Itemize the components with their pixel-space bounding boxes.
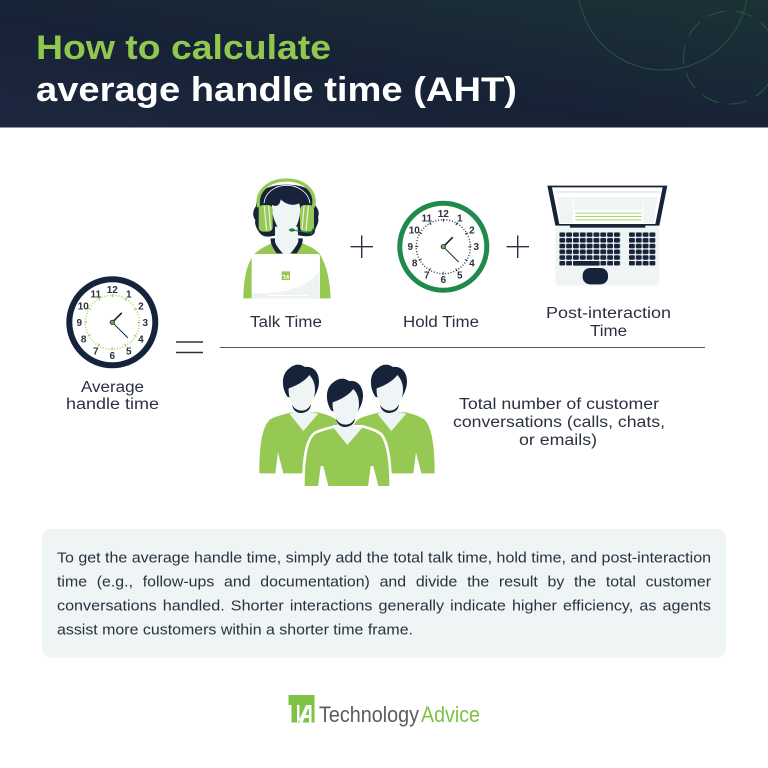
- label: total number of customer conversations: conversations (calls, chats,: [453, 414, 665, 431]
- logo: TechnologyAdvice: [288, 695, 480, 727]
- icon: average handle time clock: 4: [138, 334, 144, 345]
- title: average handle time (AHT): [36, 71, 517, 109]
- label: post-interaction time: Time: [590, 323, 627, 340]
- icon: average handle time clock: 2: [138, 301, 144, 312]
- label: post-interaction time: Post-interaction: [546, 305, 671, 322]
- icon: group of three people: [259, 365, 435, 487]
- title: How to calculate: [36, 29, 331, 67]
- panel: explanation: assist more customers within a shorter time frame.: [57, 621, 413, 638]
- title: [36, 29, 517, 109]
- icon: agent with headset and laptop: [243, 180, 331, 298]
- equals sign: [176, 342, 203, 352]
- icon: hold time clock: 5: [457, 271, 463, 282]
- icon: average handle time clock: 6: [110, 351, 116, 362]
- icon: average handle time clock: 7: [93, 346, 99, 357]
- label: post-interaction time: [546, 305, 671, 340]
- icon: average handle time clock: 1: [126, 289, 132, 300]
- icon: hold time clock: 8: [412, 259, 418, 270]
- icon: hold time clock: 12: [438, 209, 449, 220]
- plus sign one: [350, 236, 373, 258]
- icon: hold time clock: 11: [422, 214, 433, 225]
- icon: average handle time clock: 9: [77, 318, 83, 329]
- icon: hold time clock: 6: [441, 275, 447, 286]
- icon: hold time clock: 10: [409, 226, 420, 237]
- icon: average handle time clock: 11: [91, 289, 102, 300]
- icon: hold time clock: 7: [424, 271, 430, 282]
- plus sign two: [506, 236, 529, 258]
- panel: explanation: To get the average handle time, simply add the total talk time, hold time, and post-interaction: [57, 549, 711, 566]
- label: hold time: Hold Time: [403, 314, 479, 331]
- icon: hold time clock: 4: [469, 259, 475, 270]
- label: total number of customer conversations: [453, 396, 665, 449]
- icon: hold time clock: 2: [469, 226, 475, 237]
- label: total number of customer conversations: or emails): [519, 432, 597, 449]
- icon: laptop: [547, 186, 667, 286]
- icon: hold time clock: 9: [408, 242, 414, 253]
- fraction divider: [220, 346, 705, 348]
- label: average handle time: [66, 379, 159, 413]
- icon: average handle time clock: [69, 279, 155, 365]
- icon: average handle time clock: 3: [143, 318, 149, 329]
- label: average handle time: handle time: [66, 396, 159, 413]
- icon: hold time clock: [400, 203, 487, 290]
- panel: explanation: [42, 529, 726, 658]
- panel: explanation: time (e.g., follow-ups and documentation) and divide the result by the total customer: [57, 574, 711, 590]
- label: talk time: Talk Time: [250, 314, 322, 331]
- logo: TechnologyAdvice: Advice: [421, 702, 480, 727]
- icon: hold time clock: 3: [474, 242, 480, 253]
- label: average handle time: Average: [81, 379, 144, 396]
- label: total number of customer conversations: Total number of customer: [459, 396, 659, 413]
- icon: average handle time clock: 10: [78, 301, 89, 312]
- logo: TechnologyAdvice: Technology: [319, 702, 419, 727]
- icon: average handle time clock: 12: [107, 285, 118, 296]
- header band: [0, 0, 768, 128]
- icon: average handle time clock: 8: [81, 334, 87, 345]
- keyboard: [559, 232, 656, 284]
- panel: explanation: conversations handled. Shorter interactions generally indicate higher efficiency, as agents: [57, 598, 711, 614]
- icon: hold time clock: 1: [457, 214, 463, 225]
- icon: average handle time clock: 5: [126, 346, 132, 357]
